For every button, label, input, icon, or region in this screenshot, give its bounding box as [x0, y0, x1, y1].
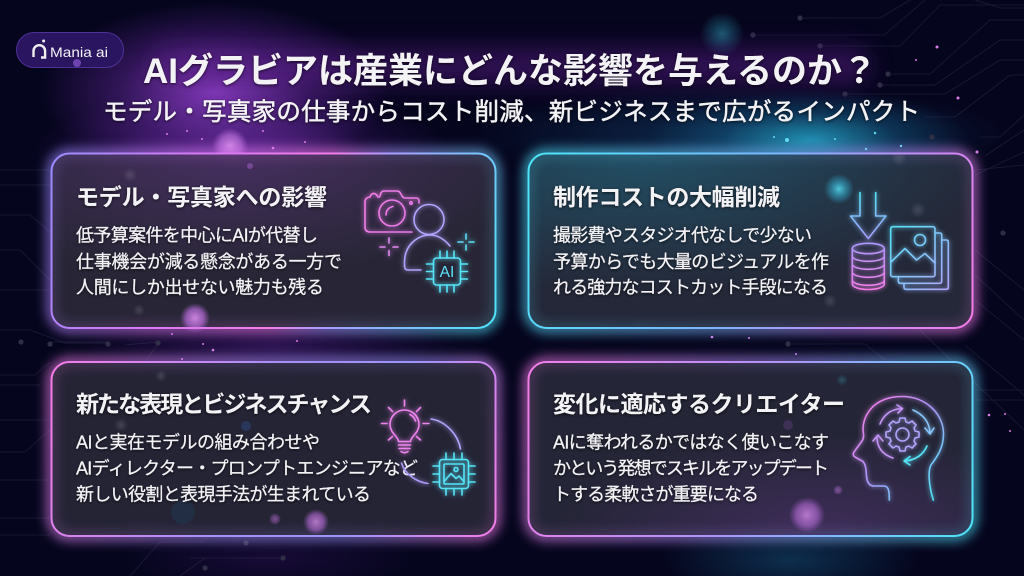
icon: light bulb and image chip — [382, 400, 475, 495]
panel: creators adapting to change — [528, 362, 972, 536]
icon: camera, person and AI chip — [365, 191, 474, 292]
circuit lines: left — [0, 170, 286, 576]
logo badge — [16, 32, 124, 68]
body text: 撮影費やスタジオ代なしで少ない — [553, 226, 812, 246]
body text: れる強力なコストカット手段になる — [553, 278, 828, 298]
body text: AIディレクター・プロンプトエンジニアなど — [76, 458, 418, 478]
body text — [76, 226, 342, 298]
body text — [553, 432, 829, 504]
body text: 低予算案件を中心にAIが代替し — [76, 226, 318, 246]
title: AIグラビアは産業にどんな影響を与えるのか？ — [143, 52, 877, 91]
body text: トする柔軟さが重要になる — [553, 484, 759, 504]
title glow — [150, 48, 870, 84]
body text: 予算からでも大量のビジュアルを作 — [553, 252, 829, 272]
sparkle particles — [166, 46, 1011, 432]
subtitle: モデル・写真家の仕事からコスト削減、新ビジネスまで広がるインパクト — [103, 98, 920, 126]
body text: AIに奪われるかではなく使いこなす — [553, 432, 829, 452]
panel: new expression and business chances — [52, 362, 496, 536]
panel: model and photographer impact — [52, 154, 496, 333]
body text: 仕事機会が減る懸念がある一方で — [76, 252, 342, 272]
heading: 新たな表現とビジネスチャンス — [76, 391, 372, 417]
body text: AIと実在モデルの組み合わせや — [76, 432, 320, 452]
body text: かという発想でスキルをアップデート — [553, 458, 829, 478]
heading: 変化に適応するクリエイター — [553, 391, 845, 417]
heading: 制作コストの大幅削減 — [553, 184, 780, 210]
body text: 人間にしか出せない魅力も残る — [76, 278, 324, 298]
icon: arrow, coins and images — [850, 192, 948, 290]
circuit lines: right — [750, 0, 1024, 430]
body text — [553, 226, 829, 298]
body text — [76, 432, 418, 504]
body text: 新しい役割と表現手法が生まれている — [76, 484, 371, 504]
icon label: AI: AI — [440, 264, 454, 281]
logo wordmark: Mania ai — [50, 44, 108, 60]
panel: production cost reduction — [528, 150, 972, 328]
icon: head with gear — [853, 396, 944, 500]
logo mark — [34, 40, 45, 58]
heading: モデル・写真家への影響 — [76, 184, 327, 210]
